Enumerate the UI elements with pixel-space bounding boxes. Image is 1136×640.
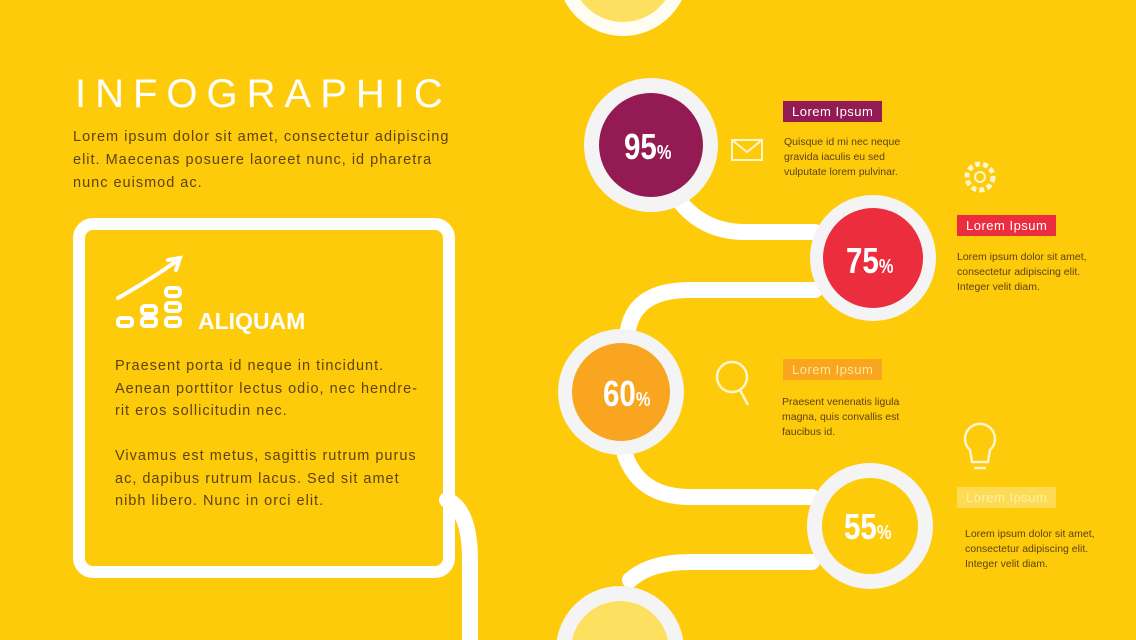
left panel box [79,224,449,572]
intro text [73,129,449,191]
bottom partial circle [556,586,684,640]
tag 4 [957,487,1056,508]
panel text: ac, dapibus rutrum lacus. Sed sit amet [115,470,400,486]
tag 1 [783,101,882,122]
tag 3: Lorem Ipsum [792,362,873,377]
text 3: Praesent venenatis ligula magna, quis convallis est faucibus id. [782,396,899,438]
top partial circle [557,0,689,36]
panel text: Aenean porttitor lectus odio, nec hendre- [115,380,418,396]
text 2: Lorem ipsum dolor sit amet, consectetur adipiscing elit. Integer velit diam. [957,251,1087,293]
number 60: 60% [603,373,650,414]
panel text [115,358,418,509]
icon: bulb [965,424,995,468]
title: INFOGRAPHIC [75,72,452,116]
intro text: nunc euismod ac. [73,175,203,191]
tag 3 [783,359,882,380]
panel heading: ALIQUAM [198,308,305,334]
number 95: 95% [624,126,671,167]
number 75: 75% [846,240,893,281]
circle 60 [558,329,684,455]
tag 2: Lorem Ipsum [966,218,1047,233]
intro text: elit. Maecenas posuere laoreet nunc, id pharetra [73,152,432,168]
text 1: Quisque id mi nec neque gravida iaculis eu sed vulputate lorem pulvinar. [784,136,900,178]
icon: gear [967,164,993,190]
panel text: rit eros sollicitudin nec. [115,403,288,419]
circle 55 [807,463,933,589]
tag 1: Lorem Ipsum [792,104,873,119]
icon: envelope [732,140,762,160]
panel text: Praesent porta id neque in tincidunt. [115,358,384,374]
number 55: 55% [844,506,891,547]
icon: chart [118,258,180,326]
text 4: Lorem ipsum dolor sit amet, consectetur adipiscing elit. Integer velit diam. [965,528,1095,570]
tag 4: Lorem Ipsum [966,490,1047,505]
circle 95 [584,78,718,212]
panel text: nibh libero. Nunc in orci elit. [115,493,324,509]
panel text: Vivamus est metus, sagittis rutrum purus [115,448,417,464]
circle 75 [810,195,936,321]
tag 2 [957,215,1056,236]
icon: magnifier [717,362,748,405]
intro text: Lorem ipsum dolor sit amet, consectetur adipiscing [73,129,449,145]
